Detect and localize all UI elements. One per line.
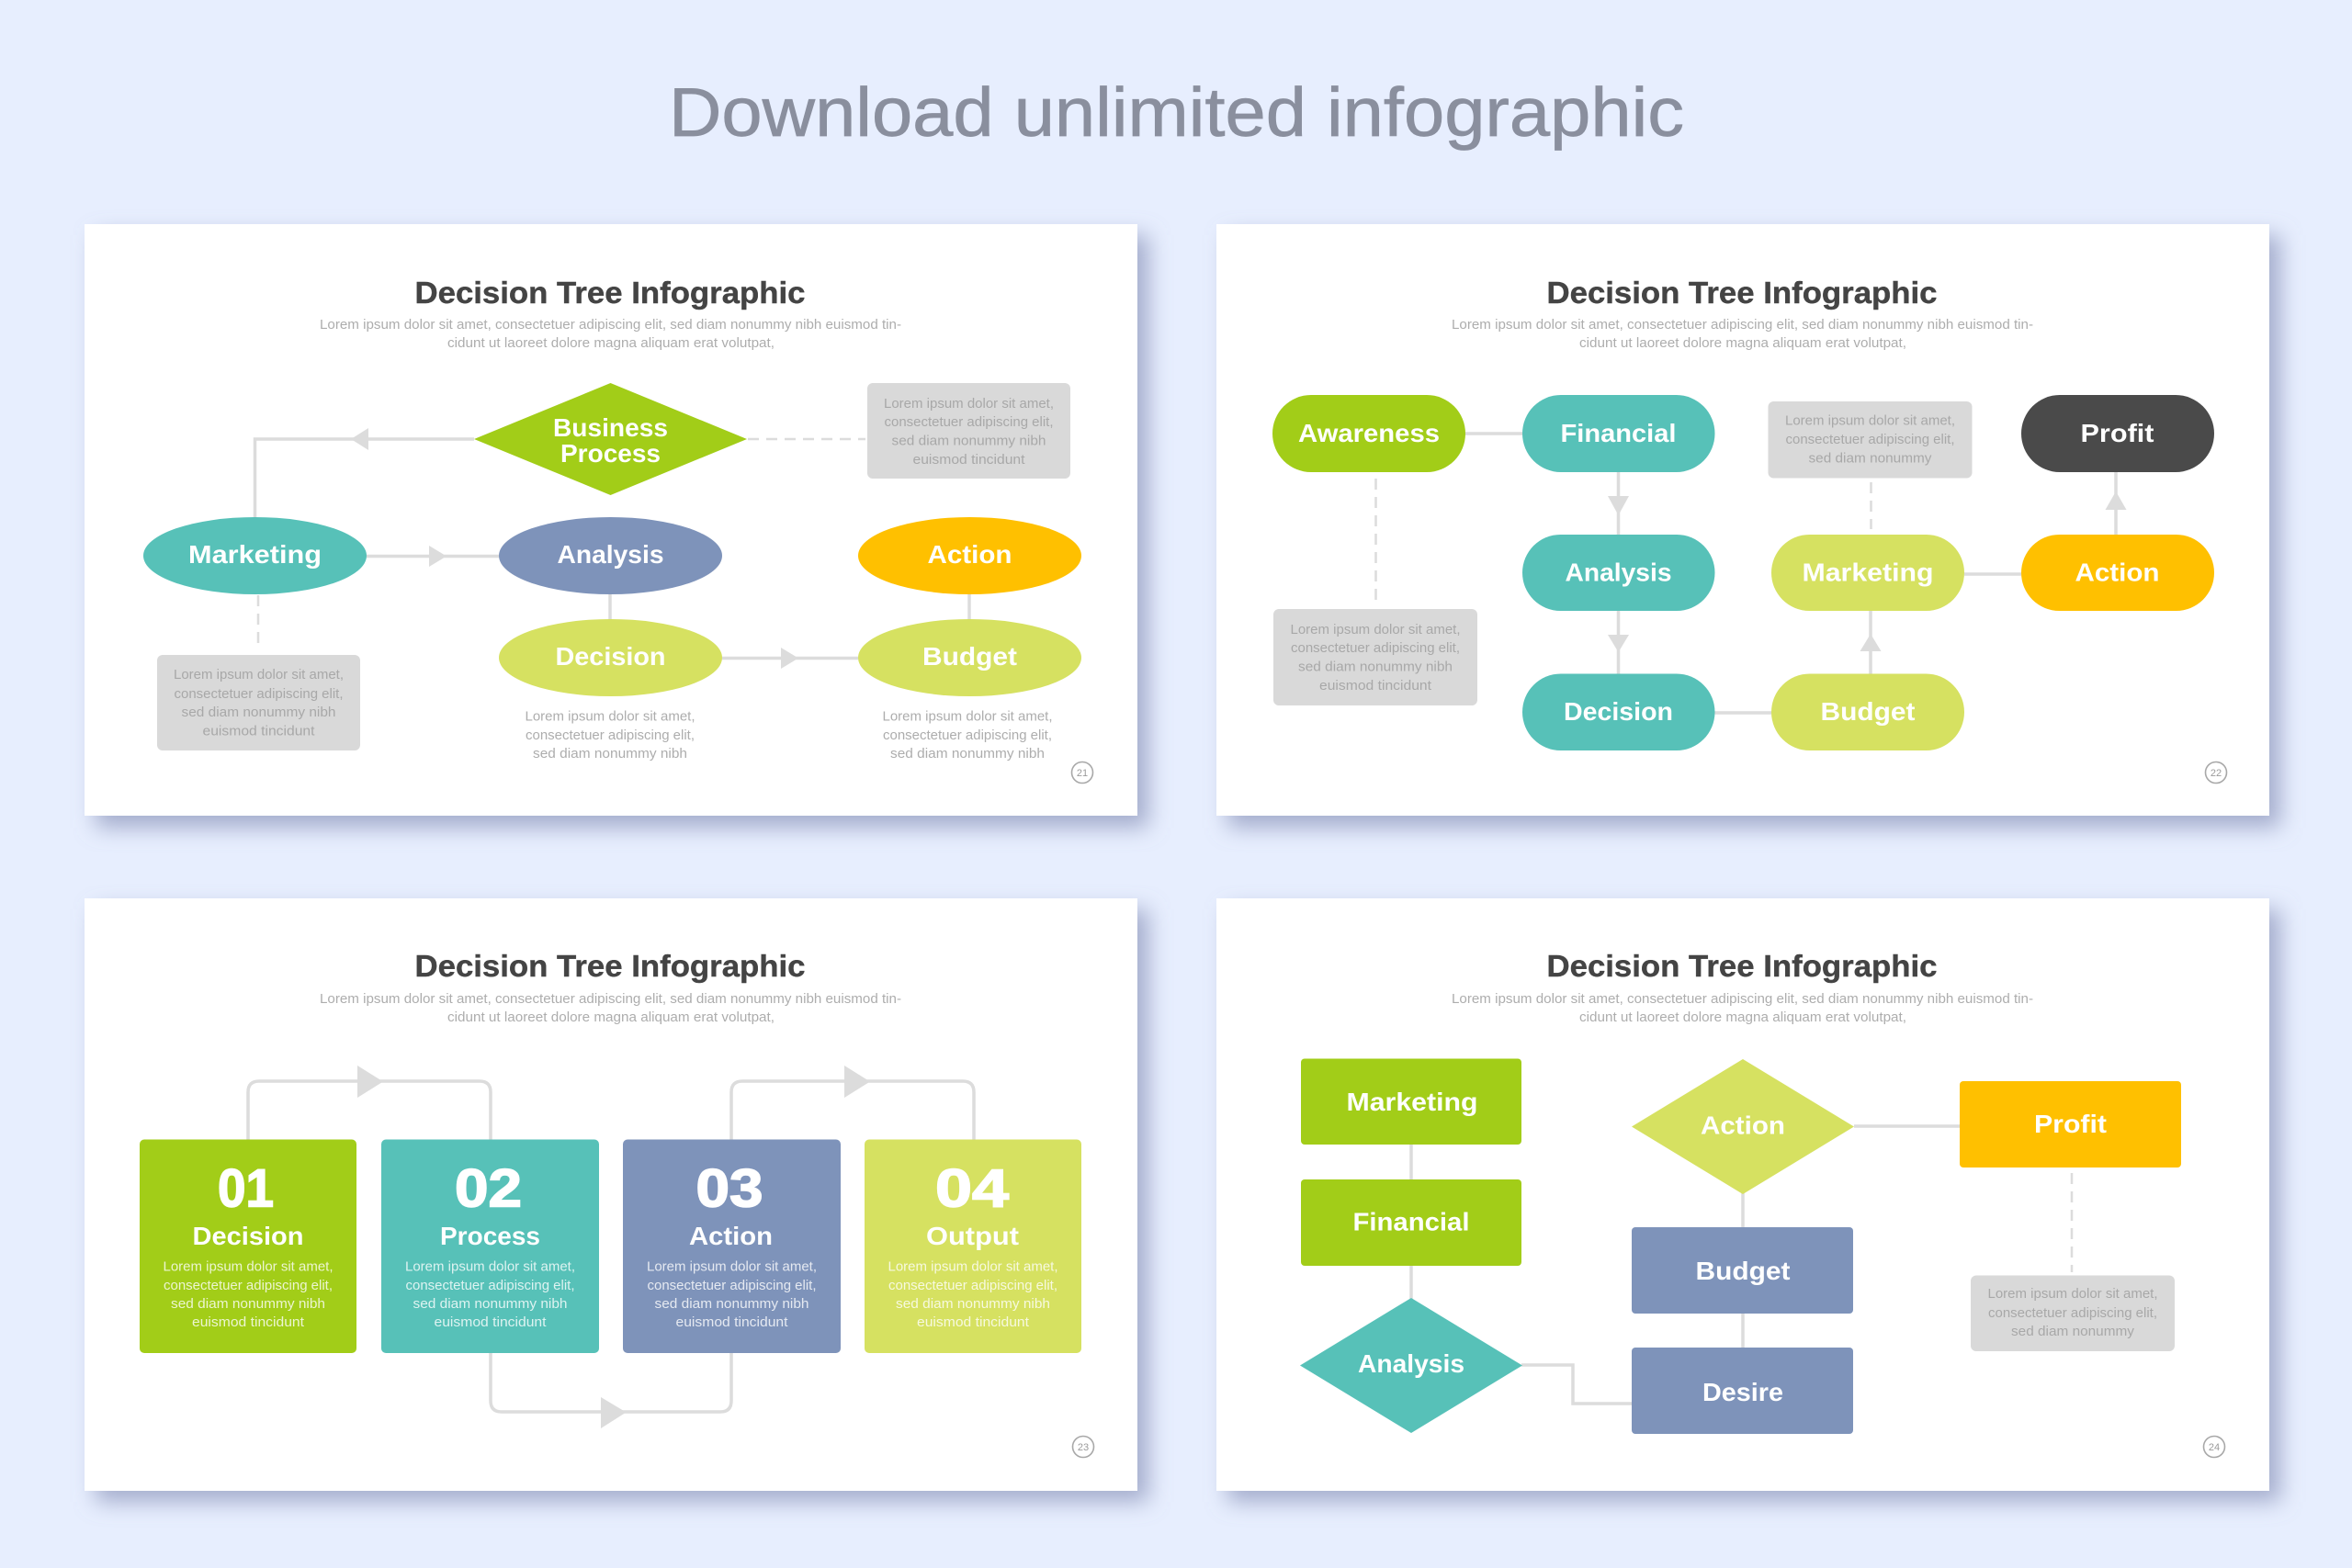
card: 01 decision: 01 [218,1159,274,1218]
pill: awareness [1272,395,1465,472]
connector: decision to budget [722,648,858,669]
card: 02 process: Lorem ipsum dolor sit amet, [405,1258,575,1275]
pill: financial [1522,395,1714,472]
connector: action to profit [1854,1124,1960,1128]
slide subtitle: Lorem ipsum dolor sit amet, consectetuer adipiscing elit, sed diam nonummy nibh euismod tin- [320,317,901,333]
pill: marketing: Marketing [1803,558,1933,586]
note: bottom left: consectetuer adipiscing elit, [1291,640,1460,656]
note: top centre: Lorem ipsum dolor sit amet, [1785,413,1955,429]
pill: analysis: Analysis [1566,558,1672,586]
card: 04 output: Output [926,1222,1019,1250]
note: bottom left: consectetuer adipiscing elit, [175,686,344,702]
page number 24 [2203,1437,2225,1457]
connector: analysis to decision [1608,611,1629,674]
ellipse: decision [499,619,722,696]
connector: marketing to note [1870,482,1872,529]
slide title: Decision Tree Infographic [1547,949,1937,983]
note: right: consectetuer adipiscing elit, [1988,1305,2157,1321]
slide subtitle: Lorem ipsum dolor sit amet, consectetuer adipiscing elit, sed diam nonummy nibh euismod tin- [320,991,901,1007]
pill: action [2021,535,2214,611]
ellipse: analysis [499,517,722,594]
card: 01 decision: Lorem ipsum dolor sit amet, [164,1258,333,1275]
card: 04 output: 04 [935,1159,1009,1218]
text: decision description: sed diam nonummy nibh [533,746,687,761]
card: 04 output [865,1139,1081,1353]
connector: profit to note [2071,1173,2073,1272]
note: top centre: sed diam nonummy [1808,450,1932,466]
pill: profit: Profit [2080,419,2154,447]
card: 02 process: consectetuer adipiscing elit, [406,1278,575,1293]
arrow: step 3 to step 4 [731,1066,974,1140]
box: financial [1301,1179,1521,1266]
card: 04 output: euismod tincidunt [917,1314,1030,1330]
main heading: Download unlimited infographic [669,73,1684,151]
pill: financial: Financial [1560,419,1676,447]
connector: awareness to note [1374,479,1377,605]
text: budget description: Lorem ipsum dolor sit amet, [882,709,1053,724]
connector: awareness to financial [1465,432,1522,435]
note: top right: euismod tincidunt [913,452,1025,468]
card: 01 decision: euismod tincidunt [192,1314,305,1330]
note: right: sed diam nonummy [2011,1324,2134,1339]
box: profit [1960,1081,2181,1168]
diamond: action: Action [1701,1111,1785,1139]
pill: marketing [1771,535,1964,611]
note: bottom left: sed diam nonummy nibh [182,705,336,720]
card: 04 output: consectetuer adipiscing elit, [888,1278,1057,1293]
card: 02 process: euismod tincidunt [434,1314,547,1330]
connector: financial to analysis [1608,472,1629,535]
ellipse: marketing: Marketing [188,540,322,569]
slide subtitle: Lorem ipsum dolor sit amet, consectetuer adipiscing elit, sed diam nonummy nibh euismod tin- [1452,317,2033,333]
connector: marketing to financial [1409,1145,1413,1179]
text: budget description [882,709,1053,761]
pill: awareness: Awareness [1298,419,1440,447]
page number 22 [2205,762,2227,783]
slide subtitle: cidunt ut laoreet dolore magna aliquam erat volutpat, [1579,1010,1906,1025]
page number 23 [1073,1437,1093,1457]
slide subtitle: cidunt ut laoreet dolore magna aliquam erat volutpat, [447,335,775,351]
card: 01 decision: Decision [193,1222,303,1250]
ellipse: budget [858,619,1081,696]
card: 02 process: Process [440,1222,540,1250]
ellipse: marketing [143,517,367,594]
card: 03 action: Lorem ipsum dolor sit amet, [647,1258,817,1275]
slide subtitle [1452,317,2033,351]
ellipse: analysis: Analysis [557,540,663,569]
note: top centre [1768,401,1972,478]
arrow: step 2 to step 3 [491,1353,731,1428]
text: decision description [526,709,695,761]
diamond: analysis: Analysis [1358,1349,1464,1378]
card: 03 action: 03 [696,1159,763,1218]
panel: flowchart (slide 24) [1216,898,2280,1502]
ellipse: budget: Budget [922,642,1017,671]
note: right [1971,1275,2175,1351]
connector: marketing to analysis [367,546,499,567]
slide title: Decision Tree Infographic [1547,276,1937,310]
ellipse: decision: Decision [555,642,665,671]
connector: budget to desire [1741,1314,1745,1348]
card: 02 process: 02 [455,1159,522,1218]
diamond: business process: Business [553,413,668,442]
pill: profit [2021,395,2214,472]
note: bottom left: euismod tincidunt [202,724,315,739]
page number 21 [1071,762,1093,783]
box: financial: Financial [1352,1207,1470,1236]
connector: analysis to desire [1521,1365,1633,1404]
box: desire [1632,1348,1853,1434]
text: budget description: sed diam nonummy nibh [890,746,1045,761]
diamond: analysis [1300,1298,1522,1433]
card: 01 decision: sed diam nonummy nibh [171,1296,325,1312]
diamond: business process: Process [560,439,661,468]
slide title: Decision Tree Infographic [415,949,805,983]
pill: action: Action [2075,558,2159,586]
note: bottom left: sed diam nonummy nibh [1298,660,1453,675]
text: decision description: consectetuer adipiscing elit, [526,728,695,743]
diamond: business process [474,383,747,495]
card: 04 output: Lorem ipsum dolor sit amet, [888,1258,1058,1275]
note: top right: Lorem ipsum dolor sit amet, [884,396,1054,412]
card: 02 process [381,1139,599,1353]
card: 04 output: sed diam nonummy nibh [896,1296,1050,1312]
connector: decision to budget [1714,711,1771,715]
note: bottom left [157,655,360,750]
connector: financial to analysis [1409,1266,1413,1299]
ellipse: action [858,517,1081,594]
note: top centre: consectetuer adipiscing elit, [1786,432,1955,447]
connector: analysis to decision [608,593,612,621]
slide subtitle [320,991,901,1025]
pill: analysis [1522,535,1714,611]
note: top right: sed diam nonummy nibh [891,434,1046,448]
box: budget: Budget [1696,1257,1790,1285]
pill: decision [1522,674,1714,750]
text: decision description: Lorem ipsum dolor sit amet, [526,709,695,724]
slide subtitle: cidunt ut laoreet dolore magna aliquam erat volutpat, [1579,335,1906,351]
note: bottom left [1273,609,1477,705]
card: 03 action: euismod tincidunt [676,1314,788,1330]
pill: budget: Budget [1821,697,1915,726]
page number 24: 24 [2209,1442,2220,1453]
slide subtitle [1452,991,2033,1025]
note: right: Lorem ipsum dolor sit amet, [1988,1286,2157,1302]
connector: action to budget [1741,1193,1745,1227]
box: desire: Desire [1702,1378,1783,1406]
card: 03 action: consectetuer adipiscing elit, [647,1278,816,1293]
connector: business process to marketing [255,428,474,517]
slide subtitle: cidunt ut laoreet dolore magna aliquam erat volutpat, [447,1010,775,1025]
slide title: Decision Tree Infographic [415,276,805,310]
panel: numbered steps (slide 23) [85,898,1148,1502]
connector: marketing to note [257,595,259,650]
pill: budget [1771,674,1964,750]
card: 03 action: Action [689,1222,773,1250]
pill: decision: Decision [1564,697,1673,726]
connector: action to budget [967,593,971,621]
note: top right [867,383,1070,479]
box: marketing [1301,1058,1521,1145]
slide subtitle: Lorem ipsum dolor sit amet, consectetuer adipiscing elit, sed diam nonummy nibh euismod tin- [1452,991,2033,1007]
connector: business process to note [748,438,865,440]
panel: pill decision tree (slide 22) [1216,224,2280,828]
box: budget [1632,1227,1853,1314]
connector: marketing to action [1964,572,2021,576]
card: 02 process: sed diam nonummy nibh [413,1296,568,1312]
card: 01 decision [140,1139,356,1353]
connector: budget to marketing [1860,611,1882,674]
ellipse: action: Action [928,540,1012,569]
diamond: action [1632,1059,1854,1194]
panel: ellipse decision tree (slide 21) [85,224,1148,828]
note: top right: consectetuer adipiscing elit, [884,414,1053,430]
box: marketing: Marketing [1347,1088,1477,1116]
slide subtitle [320,317,901,351]
card: 03 action [623,1139,841,1353]
arrow: step 1 to step 2 [248,1066,491,1140]
box: profit: Profit [2034,1110,2107,1138]
card: 03 action: sed diam nonummy nibh [654,1296,808,1312]
note: bottom left: euismod tincidunt [1319,678,1432,694]
note: bottom left: Lorem ipsum dolor sit amet, [174,667,344,682]
text: budget description: consectetuer adipiscing elit, [883,728,1052,743]
card: 01 decision: consectetuer adipiscing elit, [164,1278,333,1293]
page number 21: 21 [1077,768,1088,779]
page number 22: 22 [2211,768,2222,779]
connector: action to profit [2106,472,2126,535]
page number 23: 23 [1078,1442,1089,1453]
note: bottom left: Lorem ipsum dolor sit amet, [1290,622,1461,637]
